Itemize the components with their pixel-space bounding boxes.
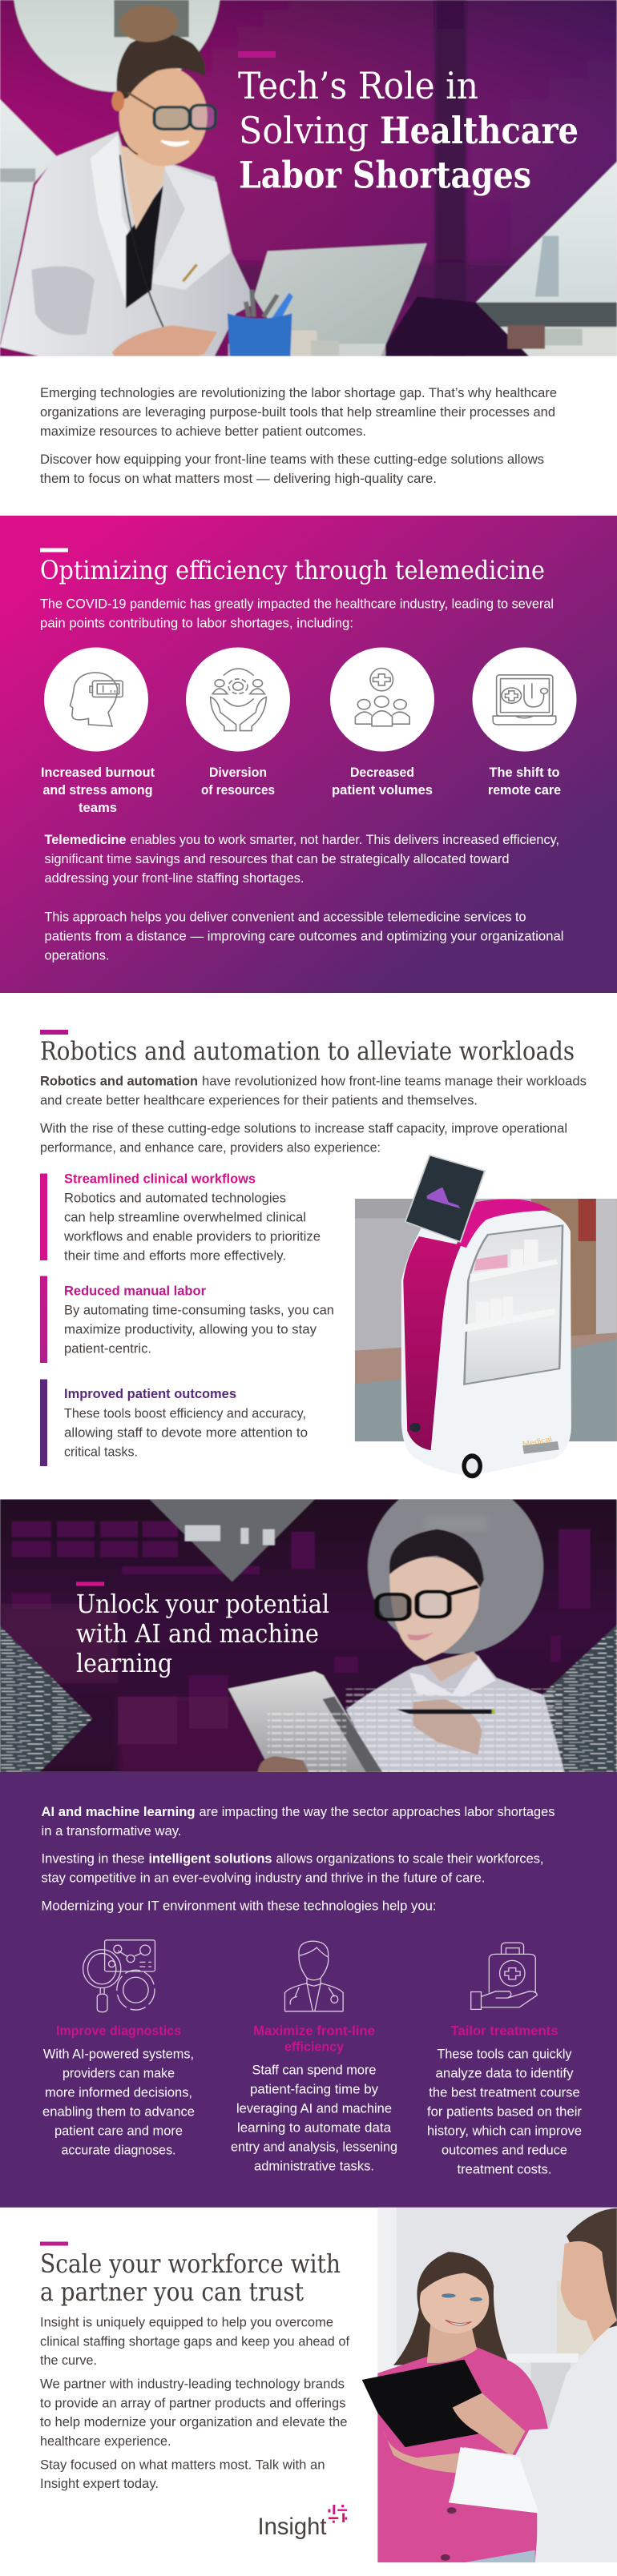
partner body text: the curve. — [40, 2353, 97, 2368]
icon: doctor with stethoscope — [284, 1941, 343, 2011]
AI intro text: are impacting the way the sector approaches labor shortages — [199, 1805, 554, 1819]
column: tailor treatments: Tailor treatments — [450, 2024, 558, 2039]
telemedicine body text: significant time savings and resources that can be strategically allocated toward — [45, 852, 510, 866]
telemedicine intro text: pain points contributing to labor shortages, including: — [40, 617, 353, 631]
partner body text: Stay focused on what matters most. Talk with an — [40, 2458, 325, 2473]
logo: Insight — [258, 2505, 347, 2540]
telemedicine body text — [45, 833, 564, 962]
telemedicine intro text: The COVID-19 pandemic has greatly impacted the healthcare industry, leading to several — [40, 597, 554, 612]
panel: robotics and automation — [40, 1030, 617, 1478]
intro text block: Discover how equipping your front-line teams with these cutting-edge solutions allows — [40, 452, 544, 467]
panel: hero photo and title — [0, 0, 617, 356]
item: reduced manual labor: By automating time-consuming tasks, you can — [64, 1304, 334, 1318]
icon: patients with medical cross — [355, 669, 409, 726]
AI intro text: AI and machine learning — [42, 1805, 196, 1819]
telemedicine body text: patients from a distance — improving care outcomes and optimizing your organizational — [45, 929, 564, 943]
robot photo illustration — [355, 1155, 617, 1478]
icon: head with low battery — [70, 673, 123, 726]
column: tailor treatments: for patients based on their — [427, 2104, 583, 2119]
item: improved patient outcomes: These tools boost efficiency and accuracy, — [64, 1406, 306, 1421]
robotics intro text: and create better healthcare experiences for their patients and themselves. — [40, 1094, 478, 1108]
item: streamlined clinical workflows — [40, 1172, 321, 1264]
item: reduced manual labor: Reduced manual labor — [64, 1284, 207, 1299]
heading: AI: with AI and machine — [76, 1620, 319, 1649]
heading: AI: Unlock your potential — [76, 1590, 329, 1619]
labels for pain points — [41, 766, 561, 815]
column: maximize front-line efficiency: Staff can spend more — [252, 2063, 377, 2077]
title: Solving — [239, 109, 369, 152]
labels for pain points: patient volumes — [332, 783, 433, 798]
accent bar — [40, 2242, 68, 2245]
item: reduced manual labor: patient-centric. — [64, 1342, 151, 1356]
AI intro text: intelligent solutions — [149, 1851, 272, 1866]
panel: AI and machine learning — [0, 1479, 617, 2208]
item: streamlined clinical workflows: their time and efforts more effectively. — [64, 1249, 286, 1264]
AI intro text: stay competitive in an ever-evolving industry and thrive in the future of care. — [42, 1871, 486, 1885]
AI intro text: Investing in these — [42, 1851, 144, 1866]
robotics intro text — [40, 1075, 587, 1155]
telemedicine body text: operations. — [45, 948, 109, 962]
accent bar — [40, 1030, 68, 1035]
title: Labor Shortages — [239, 154, 531, 197]
item: streamlined clinical workflows: Streamlined clinical workflows — [64, 1172, 256, 1187]
item: reduced manual labor: maximize productivity, allowing you to stay — [64, 1323, 317, 1337]
panel: purple content — [0, 1772, 617, 2208]
column: maximize front-line efficiency: entry and analysis, lessening — [231, 2140, 397, 2154]
icon: hands with gear and people — [211, 669, 266, 731]
labels for pain points: Diversion — [209, 766, 267, 780]
item: streamlined clinical workflows: can help streamline overwhelmed clinical — [64, 1211, 306, 1225]
column: improve diagnostics: enabling them to advance — [42, 2104, 195, 2119]
column: maximize front-line efficiency: efficiency — [284, 2040, 345, 2055]
heading: AI — [76, 1590, 329, 1678]
heading: partner: a partner you can trust — [40, 2278, 304, 2307]
telemedicine body text: This approach helps you deliver convenient and accessible telemedicine services to — [45, 910, 526, 924]
circle: remote care — [473, 647, 577, 751]
partner body text: to help modernize your organization and elevate the — [40, 2415, 348, 2429]
logo: Insight: Insight — [258, 2514, 327, 2540]
panel: telemedicine — [0, 516, 617, 993]
intro text block: Emerging technologies are revolutionizing the labor shortage gap. That’s why healthcare — [40, 386, 557, 400]
intro text block — [40, 386, 557, 486]
column: improve diagnostics: accurate diagnoses. — [61, 2143, 176, 2157]
partner body text: to provide an array of partner products and offerings — [40, 2396, 345, 2410]
column: maximize front-line efficiency: administrative tasks. — [254, 2159, 374, 2173]
photo illustration: doctor and patient — [362, 2208, 617, 2562]
partner body text: Insight is uniquely equipped to help you overcome — [40, 2316, 333, 2330]
column: tailor treatments — [427, 2024, 583, 2176]
labels for pain points: remote care — [488, 783, 561, 798]
column: maximize front-line efficiency: patient-facing time by — [250, 2082, 379, 2096]
heading: telemedicine: Optimizing efficiency through telemedicine — [40, 557, 545, 585]
AI intro text — [42, 1805, 554, 1914]
column: improve diagnostics: With AI-powered systems, — [43, 2047, 194, 2061]
intro text block: maximize resources to achieve better patient outcomes. — [40, 424, 366, 439]
column: tailor treatments: treatment costs. — [457, 2162, 551, 2176]
column: improve diagnostics: providers can make — [63, 2066, 175, 2080]
column: improve diagnostics — [42, 2024, 195, 2157]
title: Tech’s Role in — [238, 64, 478, 107]
column: maximize front-line efficiency: leveraging AI and machine — [236, 2101, 392, 2116]
accent bar — [238, 51, 276, 58]
telemedicine body text: addressing your front-line staffing shortages. — [45, 871, 304, 886]
partner body text: clinical staffing shortage gaps and keep you ahead of — [40, 2335, 349, 2349]
title: Healthcare — [380, 109, 579, 152]
column: tailor treatments: These tools can quickly — [438, 2047, 572, 2061]
icon: magnifier, chart and gear — [83, 1940, 155, 2012]
telemedicine body text: enables you to work smarter, not harder. This delivers increased efficiency, — [130, 833, 559, 847]
AI intro text: in a transformative way. — [42, 1824, 181, 1839]
item: streamlined clinical workflows: Robotics and automated technologies — [64, 1192, 286, 1206]
item: improved patient outcomes: allowing staff to devote more attention to — [64, 1425, 308, 1440]
AI photo illustration — [0, 1479, 617, 1772]
icon: hand holding medical kit — [471, 1943, 537, 2009]
item: reduced manual labor — [40, 1276, 334, 1363]
robotics intro text: performance, and enhance care, providers also experience: — [40, 1140, 381, 1155]
accent bar — [76, 1582, 104, 1585]
column: tailor treatments: analyze data to identify — [436, 2066, 574, 2080]
partner body text: Insight expert today. — [40, 2477, 159, 2491]
labels for pain points: The shift to — [489, 766, 559, 780]
intro text block: them to focus on what matters most — delivering high-quality care. — [40, 472, 437, 486]
title — [238, 64, 579, 197]
partner body text — [40, 2316, 349, 2491]
AI intro text: allows organizations to scale their workforces, — [276, 1851, 543, 1866]
robotics intro text: Robotics and automation — [40, 1075, 198, 1089]
labels for pain points: teams — [79, 801, 117, 815]
icon: laptop with stethoscope — [493, 675, 556, 725]
circle: resources — [186, 647, 290, 751]
panel: partner call to action — [40, 2208, 617, 2562]
circle: burnout — [44, 647, 148, 751]
labels for pain points: Increased burnout — [41, 766, 155, 780]
item: improved patient outcomes — [40, 1379, 308, 1466]
robotics intro text: have revolutionized how front-line teams manage their workloads — [202, 1075, 587, 1089]
column: tailor treatments: the best treatment course — [429, 2085, 580, 2100]
column: tailor treatments: outcomes and reduce — [442, 2143, 567, 2157]
circle: patient volumes — [330, 647, 434, 751]
heading: partner — [40, 2250, 341, 2307]
robotics intro text: With the rise of these cutting-edge solutions to increase staff capacity, improve operational — [40, 1121, 567, 1135]
item: improved patient outcomes: critical tasks. — [64, 1445, 138, 1459]
intro text block: organizations are leveraging purpose-built tools that help streamline their processes and — [40, 405, 555, 420]
column: maximize front-line efficiency: Maximize front-line — [253, 2024, 375, 2039]
partner body text: healthcare experience. — [40, 2434, 171, 2449]
labels for pain points: and stress among — [43, 783, 152, 798]
hero photo illustration: doctor at laptop — [0, 0, 617, 356]
column: maximize front-line efficiency — [231, 2024, 397, 2173]
labels for pain points: Decreased — [350, 766, 414, 780]
column: tailor treatments: history, which can improve — [427, 2124, 582, 2138]
accent bar — [40, 548, 68, 553]
robot photo illustration: Medical — [522, 1436, 553, 1449]
column: improve diagnostics: patient care and more — [54, 2124, 183, 2138]
column: improve diagnostics: Improve diagnostics — [56, 2024, 181, 2039]
AI intro text: Modernizing your IT environment with these technologies help you: — [42, 1899, 436, 1914]
labels for pain points: of resources — [201, 783, 275, 798]
item: improved patient outcomes: Improved patient outcomes — [64, 1387, 236, 1401]
heading: partner: Scale your workforce with — [40, 2250, 341, 2279]
column: maximize front-line efficiency: learning to automate data — [237, 2120, 392, 2135]
item: streamlined clinical workflows: workflows and enable providers to prioritize — [63, 1230, 321, 1244]
telemedicine intro text — [40, 597, 554, 631]
heading: AI: learning — [76, 1650, 172, 1678]
column: improve diagnostics: more informed decisions, — [45, 2085, 192, 2100]
partner body text: We partner with industry-leading technology brands — [40, 2377, 345, 2391]
telemedicine body text: Telemedicine — [45, 833, 127, 847]
